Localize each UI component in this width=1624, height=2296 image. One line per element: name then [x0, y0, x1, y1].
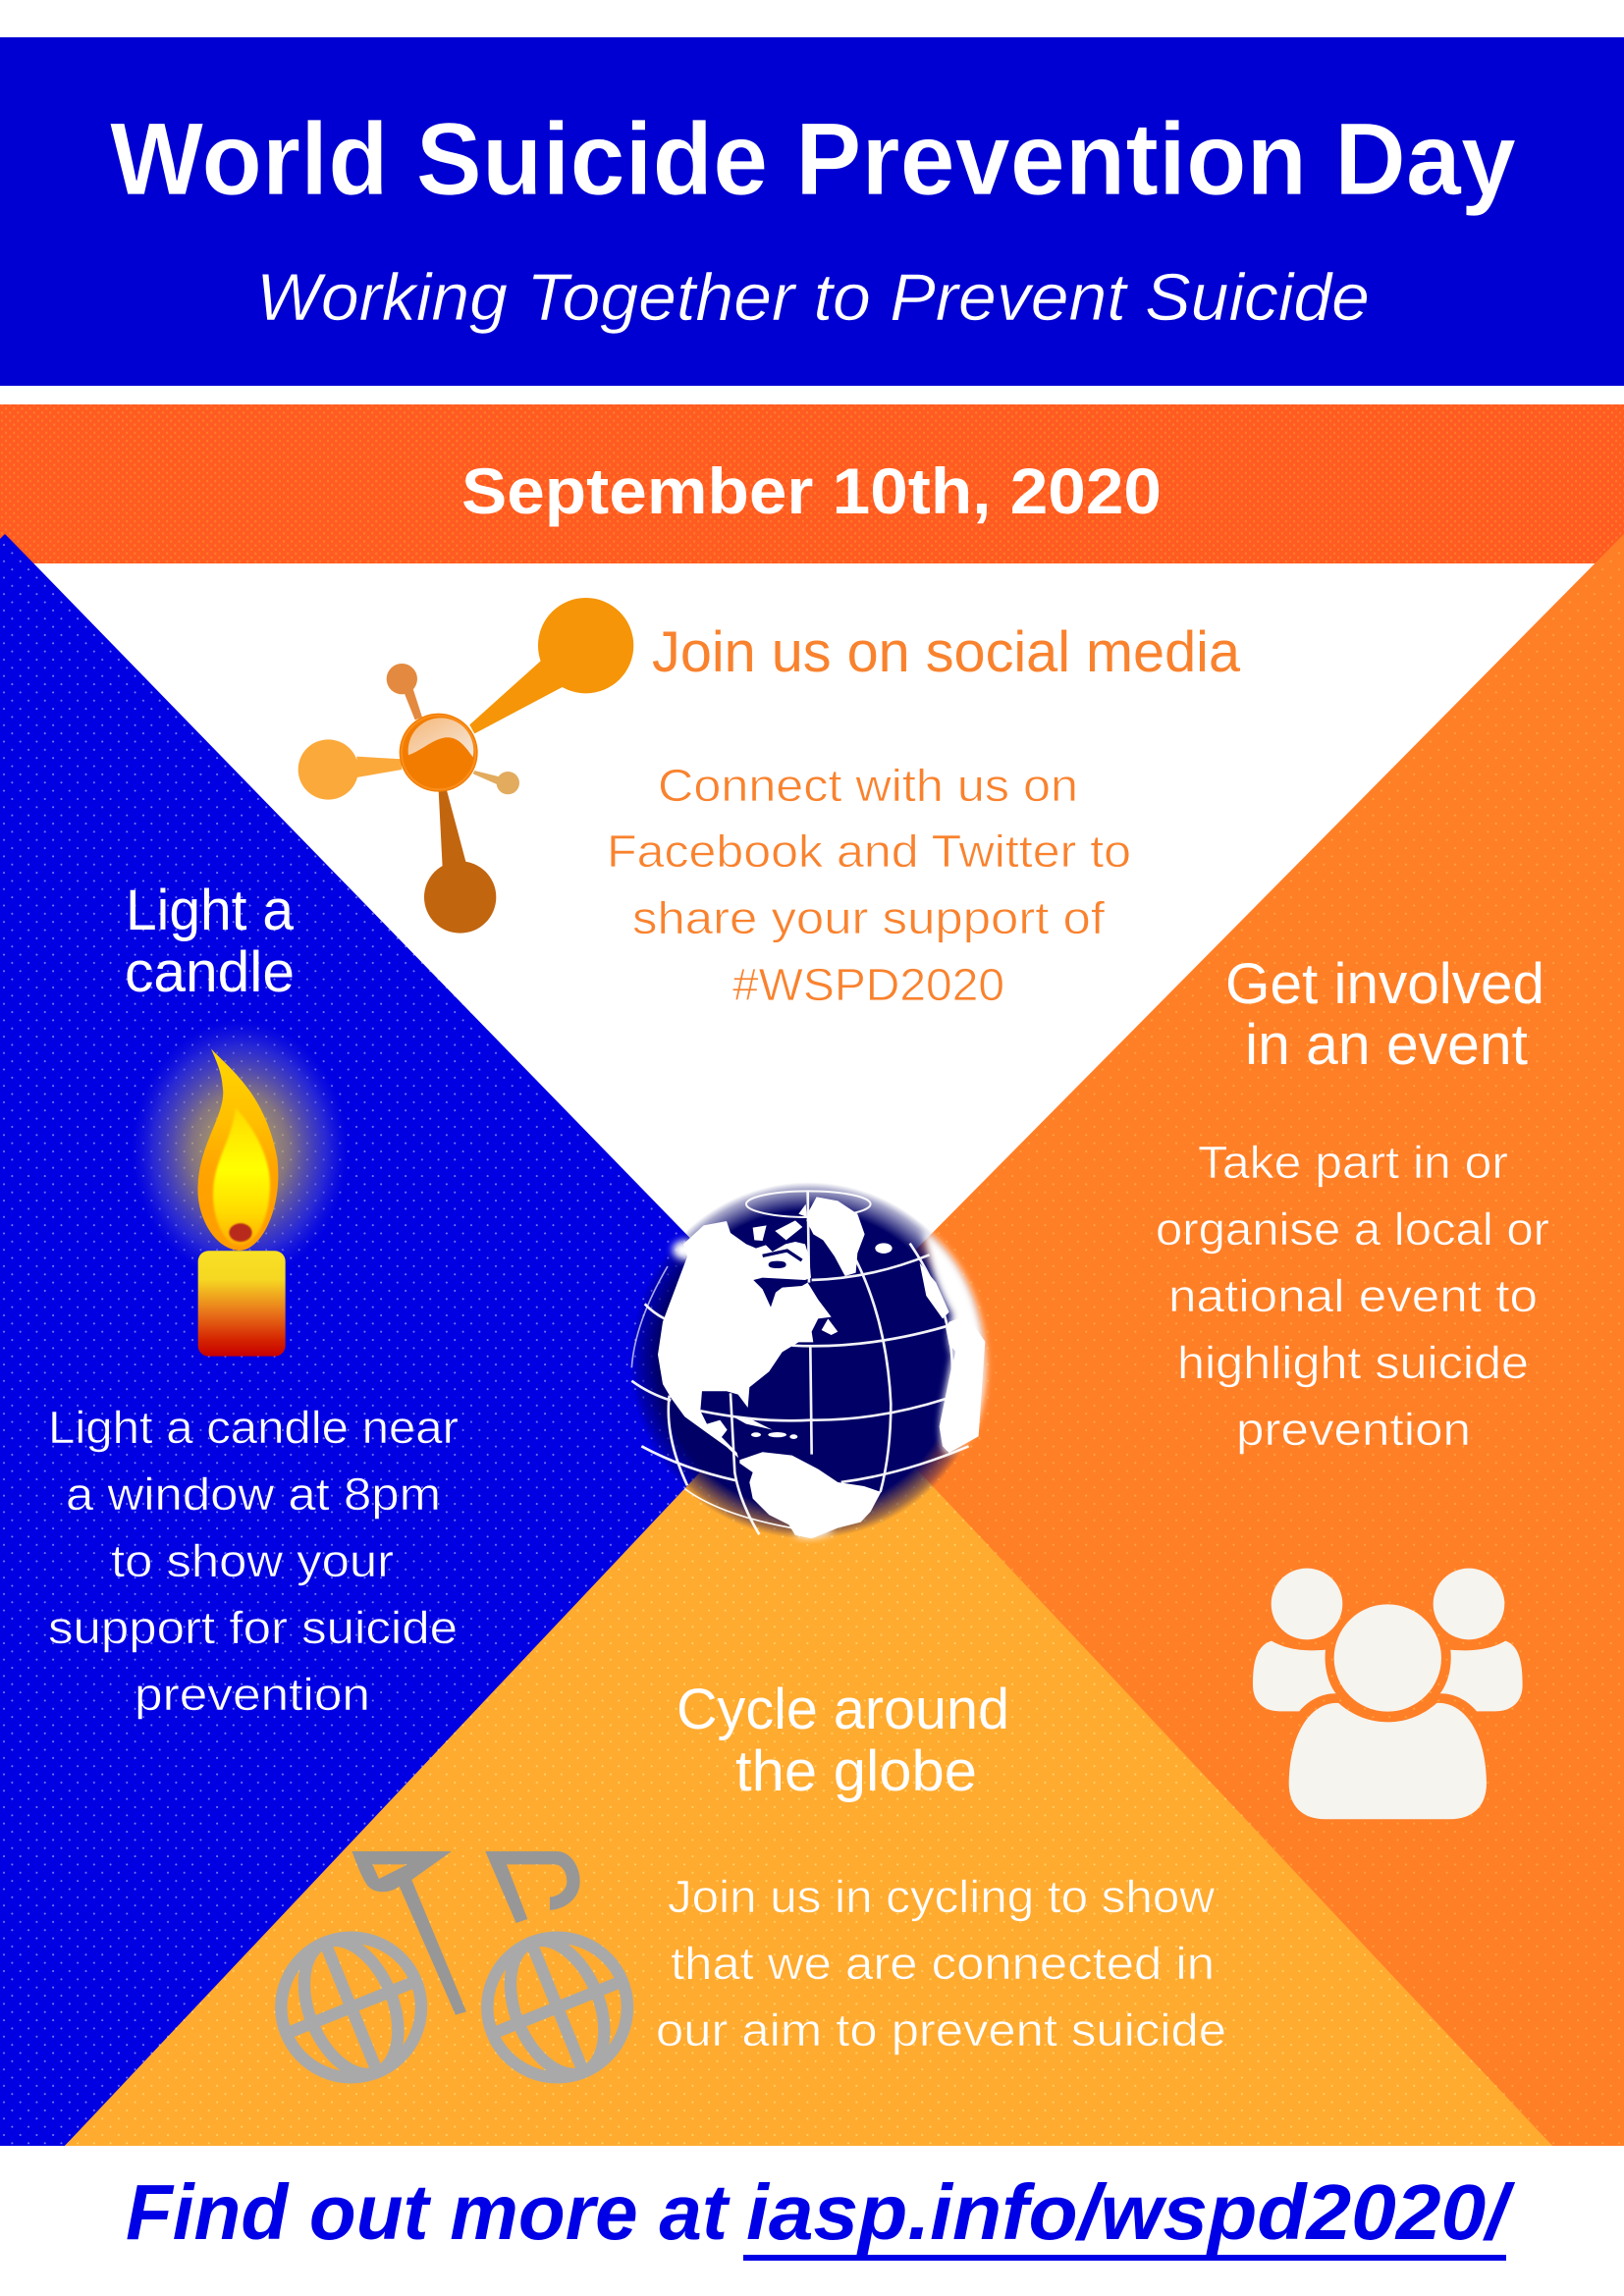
latitude and longitude lines [631, 1191, 969, 1534]
text: candle instructions: a window at 8pm [66, 1468, 441, 1520]
heading: light a candle: Light a [126, 879, 295, 942]
subtitle: Working Together to Prevent Suicide [256, 260, 1370, 335]
text: candle instructions: to show your [111, 1535, 394, 1586]
text: event: Take part in or [1198, 1137, 1508, 1188]
heading: get involved: Get involved [1225, 952, 1544, 1016]
text: candle instructions: support for suicide [48, 1602, 458, 1653]
text: event [1156, 1137, 1549, 1455]
icon: social network [298, 598, 633, 934]
text: connect: Connect with us on [658, 760, 1078, 811]
panel: light a candle [0, 534, 815, 2146]
greenland [806, 1197, 865, 1276]
text: event: highlight suicide [1177, 1337, 1529, 1388]
date band [0, 404, 1624, 563]
panel: get involved [800, 534, 1624, 2146]
text: cycling: that we are connected in [671, 1938, 1215, 1989]
text: event: prevention [1236, 1404, 1471, 1455]
text: connect: Facebook and Twitter to [607, 826, 1131, 877]
newfoundland [822, 1318, 838, 1335]
heading: cycle [677, 1678, 1009, 1803]
text: event: organise a local or [1156, 1203, 1549, 1255]
heading: join us: Join us on social media [652, 620, 1241, 684]
header banner [0, 37, 1624, 386]
text: connect [607, 760, 1131, 1010]
footer link line [126, 2168, 1516, 2261]
iceland and europe fragments [875, 1243, 893, 1254]
arctic islands [753, 1225, 767, 1241]
heading: get involved [1225, 952, 1544, 1077]
heading: get involved: in an event [1245, 1013, 1528, 1077]
footer link line: iasp.info/wspd2020/ [746, 2168, 1516, 2256]
heading: light a candle: candle [125, 940, 295, 1004]
text: cycling [656, 1871, 1226, 2056]
heading: cycle: the globe [735, 1739, 977, 1803]
icon: candle [131, 1019, 349, 1357]
caribbean [733, 1416, 773, 1430]
text: cycling: Join us in cycling to show [668, 1871, 1216, 1922]
date: September 10th, 2020 [461, 454, 1162, 527]
africa [940, 1315, 985, 1453]
panel: cycle around the globe [65, 1356, 1552, 2146]
hudson strait details [763, 1251, 802, 1266]
icon: group of people [1253, 1569, 1523, 1819]
heading: light a candle [125, 879, 295, 1004]
title: World Suicide Prevention Day [110, 102, 1516, 217]
heading: cycle: Cycle around [677, 1678, 1009, 1741]
panel: social media [0, 563, 1624, 1374]
south america [739, 1452, 881, 1538]
text: cycling: our aim to prevent suicide [656, 2004, 1226, 2056]
text: candle instructions: prevention [135, 1669, 370, 1720]
text: candle instructions [48, 1402, 459, 1720]
icon: globe bicycle [260, 1851, 648, 2099]
text: event: national event to [1168, 1270, 1538, 1321]
globe [630, 1182, 987, 1539]
footer link line: Find out more at [126, 2168, 731, 2256]
north america [658, 1221, 832, 1458]
text: connect: #WSPD2020 [732, 959, 1004, 1010]
text: connect: share your support of [632, 892, 1105, 943]
text: candle instructions: Light a candle near [48, 1402, 459, 1453]
